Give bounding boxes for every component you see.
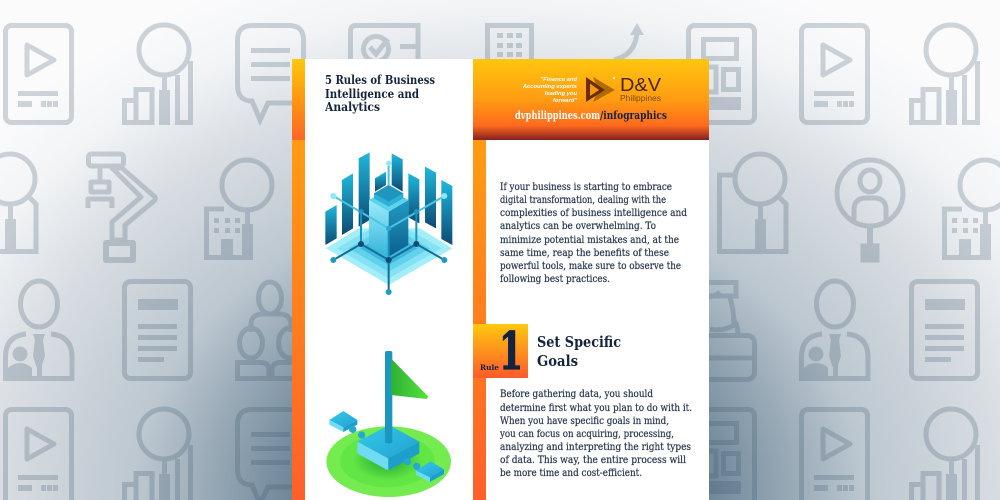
rule 1 paragraph: When you have specific goals in mind, [500, 415, 669, 427]
header banner [473, 59, 709, 140]
right column strip [473, 140, 486, 500]
icon: play document row 1 right [802, 26, 868, 122]
icon: magnifier chart row 1 right [912, 25, 978, 125]
icon: play document row 4 right [802, 410, 868, 500]
rule number: 1 [499, 322, 523, 382]
icon: magnifier chart row 1 [124, 25, 190, 125]
infographic panel [292, 59, 709, 500]
icon: magnifier building row 2 right [944, 160, 1000, 260]
intro paragraph: analytics can be overwhelming. To [500, 220, 656, 232]
icon: person row 3 [6, 281, 72, 381]
icon: office building top [488, 26, 532, 86]
icon: hat and cash block [690, 282, 755, 380]
intro paragraph: same time, reap the benefits of these [500, 247, 669, 259]
icon: magnifier document row 2 left [0, 154, 36, 252]
central cube [369, 185, 408, 257]
green flag [391, 358, 428, 399]
icon: checklist top [350, 26, 418, 90]
icon: magnifier chart row 4 right [912, 409, 978, 500]
icon: play document row 4 [6, 410, 72, 500]
icon: magnifier building row 2 [206, 160, 272, 260]
rule 1 paragraph: be more time and cost-efficient. [500, 467, 642, 479]
title: 5 Rules of Business [325, 72, 435, 87]
website url: dvphilippines.com [515, 109, 600, 122]
flag pole [385, 351, 392, 443]
icon: magnifier chart row 4 [124, 409, 190, 500]
logo wordmark: D&V [620, 74, 662, 95]
data bars [325, 152, 452, 245]
rule label: Rule [480, 363, 499, 372]
left strip header gradient [292, 59, 305, 140]
icon: robot arm [88, 154, 155, 260]
intro paragraph: minimize potential mistakes and, at the [500, 234, 679, 246]
left strip body gradient [292, 140, 305, 500]
icon: play document row 1 [6, 26, 72, 122]
icon: speech bubble row 1 [238, 26, 304, 120]
rule 1 paragraph: you can focus on acquiring, processing, [499, 428, 674, 440]
illustration: business intelligence tower [325, 152, 452, 295]
icon: document row 3 [124, 282, 190, 378]
rule 1 badge [473, 322, 528, 382]
base platform [326, 218, 452, 285]
logo country: Philippines [620, 94, 661, 103]
icon: newspaper row 1 [688, 26, 754, 122]
icon: speech bubble row 4 [238, 410, 304, 500]
logo tagline: leading you [545, 91, 577, 97]
icon: magnifier document row 2 right [720, 154, 786, 252]
intro paragraph: powerful tools, make sure to observe the [500, 260, 681, 272]
rule 1 heading: Set Specific [537, 333, 621, 351]
left small block [329, 411, 365, 439]
icon: people row 3 [238, 282, 306, 378]
title: Analytics [324, 99, 380, 114]
intro paragraph: following best practices. [500, 273, 610, 285]
rule 1 paragraph: of data. This way, the entire process will [500, 454, 687, 466]
flag base block [357, 425, 419, 471]
green target rings [326, 426, 451, 497]
icon: growth arrow top [614, 23, 644, 60]
icon: newspaper row 4 [688, 410, 754, 500]
rule 1 paragraph: determine first what you plan to do with it. [500, 402, 692, 414]
logo tagline: forward" [553, 98, 577, 104]
intro paragraph: digital transformation, dealing with the [500, 194, 666, 206]
intro paragraph: If your business is starting to embrace [500, 181, 672, 193]
right small block [404, 458, 444, 482]
icon: person row 3 right [802, 281, 868, 381]
title: Intelligence and [325, 86, 419, 101]
illustration: goal flag [326, 351, 451, 497]
icon: document row 3 right [912, 282, 978, 378]
website url: /infographics [600, 109, 667, 122]
logo tagline: Accounting experts [522, 84, 578, 90]
icon: magnifier person [837, 160, 903, 260]
network lines and nodes [330, 161, 447, 295]
rule 1 heading: Goals [537, 352, 578, 370]
logo tagline: "Finance and [540, 77, 577, 83]
intro paragraph: complexities of business intelligence and [500, 207, 687, 219]
rule 1 paragraph: analyzing and interpreting the right types [500, 441, 691, 453]
rule 1 paragraph: Before gathering data, you should [500, 388, 653, 400]
logo mark [586, 77, 615, 102]
